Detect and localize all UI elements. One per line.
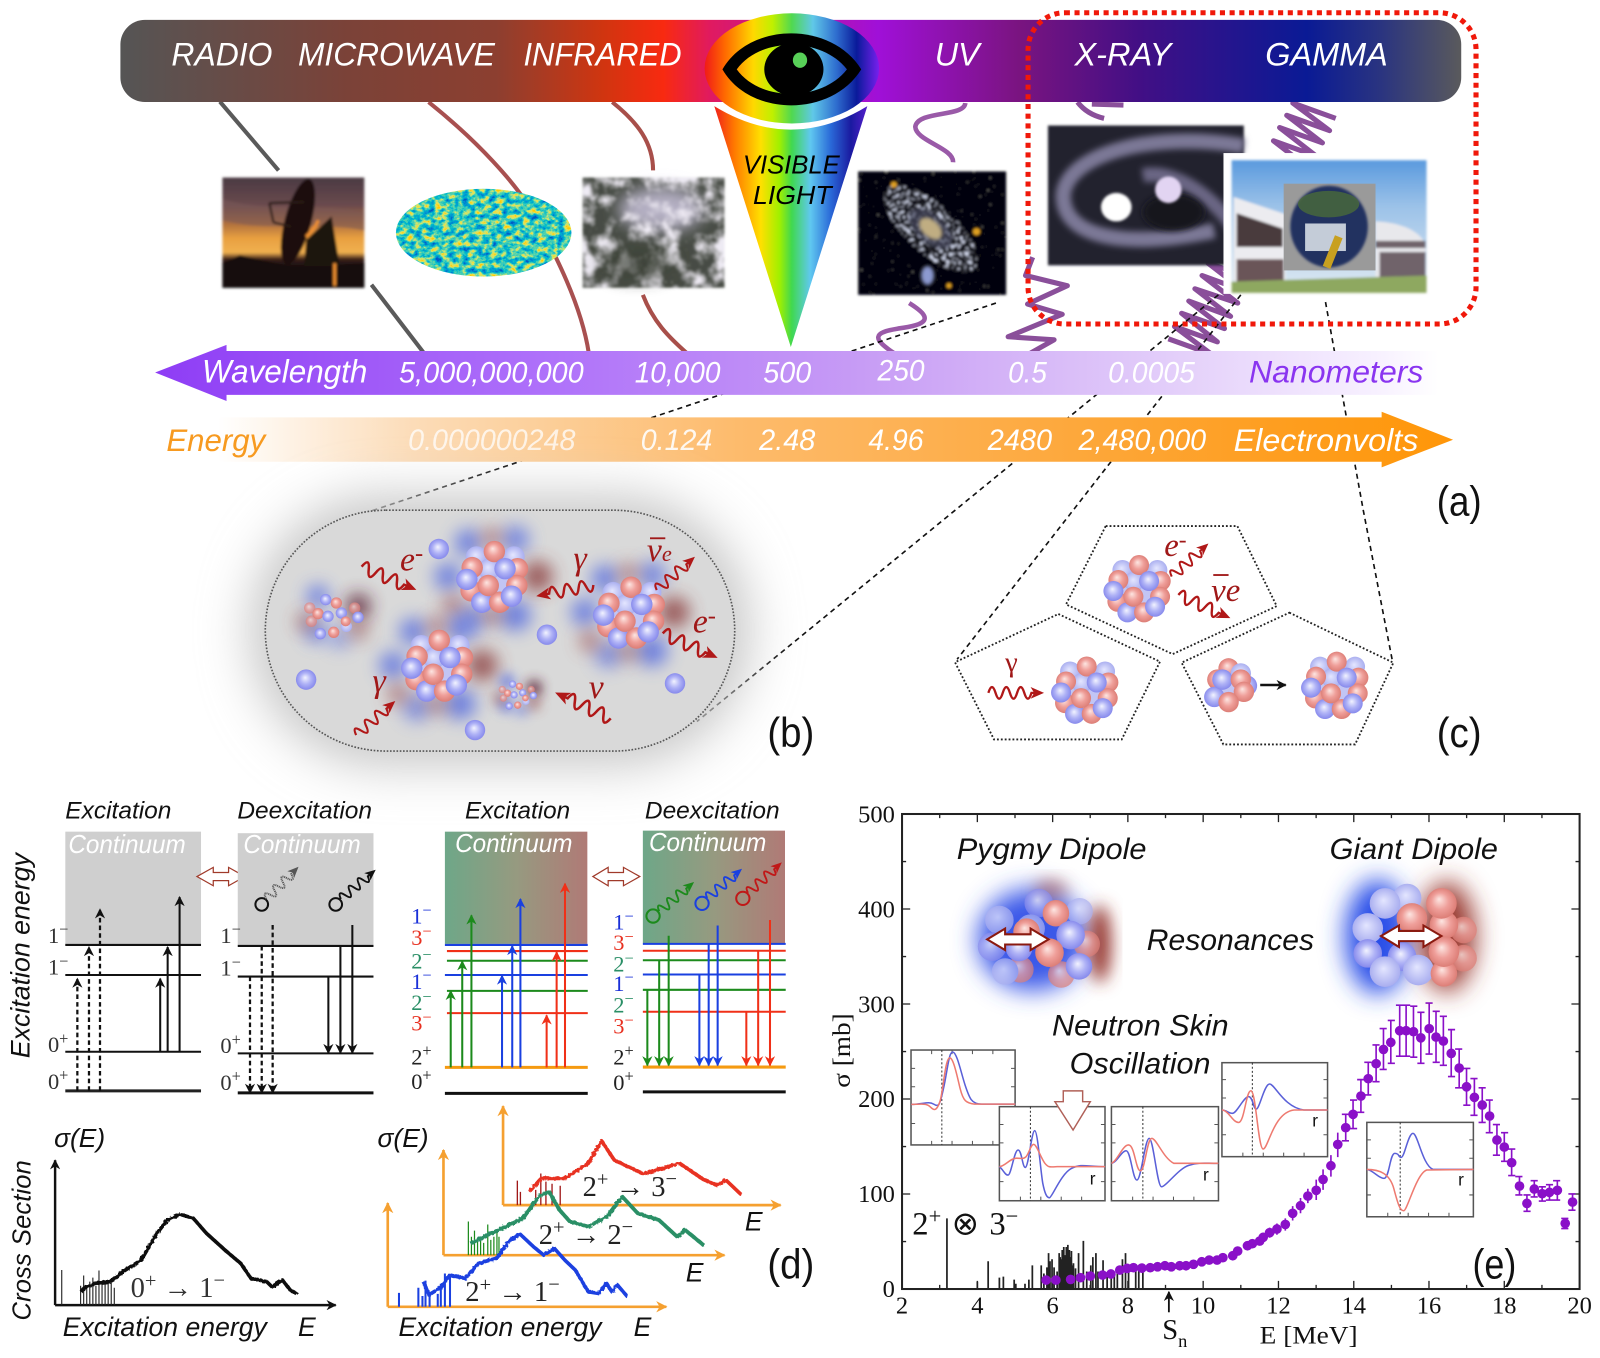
- panel (b): nuclei in stellar plasma capsule: [250, 495, 814, 766]
- wavelength labels: 0.0005: [1108, 357, 1195, 390]
- axis title: excitation energy: Excitation energy: [6, 851, 36, 1058]
- pentagon: beta decay: -: [1179, 527, 1187, 553]
- scheme: deexcitation, grey: [220, 797, 379, 1095]
- red spectrum: −: [666, 1169, 677, 1191]
- photo: radio dish at sunset: [222, 176, 364, 288]
- scheme: deexcitation, grey: −: [232, 920, 241, 939]
- band labels: GAMMA: [1265, 35, 1388, 72]
- particle labels: e: [693, 604, 708, 641]
- wavelength labels: 500: [763, 357, 812, 390]
- energy labels: 2.48: [758, 424, 816, 457]
- blue spectrum: [388, 1203, 666, 1308]
- particle labels: [372, 532, 716, 706]
- x axis labels: 4: [971, 1292, 983, 1319]
- energy labels: 2480: [987, 424, 1053, 457]
- wave: microwave: [429, 102, 589, 353]
- red spectrum: [503, 1106, 781, 1237]
- visible light label: VISIBLE: [743, 151, 841, 179]
- neutron separation marker: [1162, 1292, 1187, 1351]
- scheme: excitation, coloured: 3: [411, 925, 422, 950]
- x axis title: E [MeV]: [1260, 1320, 1358, 1349]
- scheme: deexcitation, grey: 1: [220, 923, 232, 948]
- scheme: deexcitation, coloured: −: [624, 927, 634, 946]
- scheme: deexcitation, grey: +: [232, 1067, 241, 1086]
- scheme: excitation, coloured: Continuum: [455, 830, 572, 858]
- y axis labels: 400: [858, 896, 895, 923]
- wavelength arrow: [155, 345, 1439, 401]
- chart: 2+ to 1-, 2-, 3- strength: E: [634, 1312, 652, 1342]
- scheme: deexcitation, grey: 1: [220, 956, 232, 981]
- chart: 0+ to 1- strength: −: [214, 1270, 225, 1292]
- scheme: deexcitation, coloured: 1: [613, 971, 624, 996]
- wavelength labels: Nanometers: [1249, 354, 1424, 390]
- resonance heading: pygmy: Pygmy Dipole: [957, 833, 1147, 866]
- icon: double arrow: [593, 867, 640, 886]
- inset: transition density 5: [1367, 1122, 1473, 1217]
- axis title: cross section: Cross Section: [9, 1160, 37, 1320]
- scheme: deexcitation, coloured: 2: [613, 1044, 624, 1069]
- wavelength labels: 250: [877, 355, 925, 388]
- blue spectrum: → 1: [491, 1277, 548, 1308]
- green spectrum: −: [622, 1217, 633, 1239]
- scheme: deexcitation, coloured: +: [624, 1067, 634, 1086]
- band labels: MICROWAVE: [298, 35, 496, 72]
- inset: transition density 2: r: [1090, 1169, 1096, 1189]
- chart: 0+ to 1- strength: +: [145, 1270, 156, 1292]
- image: cosmic microwave background map: [396, 189, 571, 277]
- resonance heading: Resonances: [1147, 924, 1314, 957]
- label (e): (e): [1472, 1241, 1516, 1288]
- energy arrow: [153, 412, 1453, 467]
- red spectrum: E: [745, 1207, 763, 1237]
- x axis labels: 14: [1342, 1292, 1366, 1319]
- visible light label: LIGHT: [753, 182, 834, 210]
- scheme: deexcitation, coloured: 3: [613, 930, 624, 955]
- y axis labels: 300: [858, 991, 895, 1018]
- scheme: deexcitation, coloured: −: [624, 989, 634, 1008]
- scheme: deexcitation, coloured: −: [624, 906, 634, 925]
- scheme: excitation, coloured: 2: [411, 990, 422, 1015]
- spectrum sticks: [947, 1218, 1143, 1289]
- energy labels: 0.124: [641, 424, 712, 457]
- photo: nebula: [583, 178, 724, 288]
- blue spectrum: −: [548, 1274, 560, 1296]
- wavelength labels: [202, 353, 1424, 390]
- wave: x-ray: [1008, 102, 1123, 353]
- spectrum bar: [120, 20, 1461, 102]
- arrow: neutron skin pointer: [1055, 1091, 1090, 1130]
- band labels: RADIO: [171, 35, 272, 72]
- scheme: deexcitation, grey: 0: [220, 1033, 232, 1058]
- y axis labels: 100: [858, 1181, 895, 1208]
- scheme: excitation, coloured: [411, 797, 588, 1094]
- scheme: excitation, coloured: −: [422, 1007, 432, 1026]
- scheme: excitation, coloured: 2: [411, 948, 422, 973]
- pentagon: beta decay: e: [1164, 528, 1179, 564]
- particle labels: e: [400, 541, 415, 578]
- scheme: excitation, coloured: 1: [411, 903, 422, 928]
- wave: ultraviolet: [878, 103, 965, 353]
- inset: transition density 3: r: [1203, 1165, 1209, 1185]
- pentagon: beta decay: νe: [1211, 573, 1240, 609]
- red dotted highlight box: [1028, 13, 1476, 324]
- neutron separation marker: n: [1178, 1331, 1187, 1351]
- scheme: excitation, grey: 0: [48, 1032, 59, 1057]
- y axis labels: 200: [858, 1086, 895, 1113]
- photo: spiral galaxy: [858, 171, 1006, 295]
- scheme: deexcitation, coloured: 0: [613, 1070, 624, 1095]
- scheme: deexcitation, grey: 0: [220, 1070, 232, 1095]
- neutron separation marker: S: [1162, 1315, 1178, 1346]
- dotted capsule: [265, 510, 735, 751]
- scheme: deexcitation, coloured: +: [624, 1041, 634, 1060]
- scheme: deexcitation, coloured: −: [624, 1011, 634, 1030]
- chart: 0+ to 1- strength: [54, 1125, 336, 1342]
- anti-neutrino bar: [650, 537, 665, 539]
- particle labels: -: [708, 602, 716, 629]
- visible light cone: [714, 106, 867, 347]
- data points: [1046, 1029, 1573, 1280]
- chart: 2+ to 1-, 2-, 3- strength: Excitation energy: [398, 1312, 603, 1342]
- axis title: sigma: σ [mb]: [827, 1013, 856, 1088]
- inset: transition density 4: [1222, 1063, 1328, 1157]
- red spectrum: +: [597, 1169, 608, 1191]
- icon: double arrow: [197, 867, 245, 886]
- chart: 0+ to 1- strength: E: [298, 1312, 316, 1342]
- scheme: deexcitation, grey: −: [232, 952, 241, 971]
- scheme: excitation, grey: 0: [48, 1069, 59, 1094]
- inset: transition density 2: [999, 1107, 1105, 1201]
- particle labels: -: [415, 540, 423, 567]
- particle labels: γ: [372, 663, 386, 700]
- scheme: excitation, grey: +: [59, 1029, 68, 1048]
- resonance heading: giant: Giant Dipole: [1330, 833, 1498, 866]
- scheme: excitation, coloured: 0: [411, 1069, 422, 1094]
- chart: 0+ to 1- strength: 0: [131, 1273, 145, 1304]
- red spectrum: → 3: [608, 1172, 666, 1203]
- pentagon: neutron capture: [1182, 613, 1393, 744]
- free neutrons: [296, 539, 685, 740]
- scheme: excitation, grey: 1: [48, 955, 59, 980]
- phonon coupling label: +: [929, 1204, 941, 1229]
- phonon coupling label: 2: [912, 1207, 929, 1243]
- green spectrum: E: [686, 1258, 704, 1288]
- panel (d): level schemes and cross sections: [6, 797, 814, 1342]
- particle labels: νe: [647, 532, 672, 569]
- heading: neutron skin oscillation: Oscillation: [1070, 1048, 1211, 1081]
- chart: 0+ to 1- strength: Excitation energy: [63, 1312, 269, 1342]
- green spectrum: 2: [539, 1220, 553, 1251]
- plot frame: [902, 814, 1580, 1289]
- scheme: excitation, coloured: +: [422, 1041, 432, 1060]
- band labels: UV: [935, 35, 983, 72]
- wavy arrows: [353, 553, 720, 739]
- scheme: excitation, grey: −: [59, 920, 68, 939]
- scheme: excitation, coloured: 3: [411, 1011, 422, 1036]
- scheme: deexcitation, grey: +: [232, 1030, 241, 1049]
- y axis labels: [858, 801, 895, 1303]
- scheme: excitation, coloured: −: [422, 945, 432, 964]
- scheme: excitation, grey: Continuum: [68, 831, 186, 859]
- scheme: deexcitation, grey: Deexcitation: [237, 797, 372, 824]
- capsule glow: [250, 495, 750, 766]
- energy labels: Energy: [166, 422, 267, 458]
- nucleus: giant dipole: [1345, 880, 1477, 994]
- band labels: INFRARED: [523, 35, 682, 72]
- scheme: excitation, coloured: −: [422, 922, 432, 941]
- scheme: excitation, coloured: 2: [411, 1044, 422, 1069]
- particle labels: γ: [573, 540, 587, 577]
- photo: binary neutron star merger: [1048, 126, 1244, 265]
- icon: eye: [705, 13, 879, 123]
- phonon coupling label: −: [1006, 1204, 1018, 1229]
- scheme: deexcitation, coloured: −: [624, 948, 634, 967]
- scheme: excitation, grey: 1: [48, 923, 59, 948]
- scheme: deexcitation, coloured: 1: [613, 910, 624, 935]
- photo: ALICE / laboratory building: [1223, 153, 1428, 294]
- energy labels: 2,480,000: [1078, 424, 1207, 457]
- inset: transition density 3: [1111, 1107, 1218, 1201]
- scheme: excitation, coloured: −: [422, 900, 432, 919]
- chart: 0+ to 1- strength: → 1: [156, 1273, 214, 1304]
- scheme: excitation, coloured: −: [422, 966, 432, 985]
- band labels: [171, 35, 1388, 72]
- x axis labels: 18: [1492, 1292, 1517, 1319]
- panel (e): photoabsorption cross section: [827, 801, 1592, 1351]
- x axis labels: 6: [1047, 1292, 1059, 1319]
- scheme: excitation, grey: +: [59, 1066, 68, 1085]
- chart: 2+ to 1-, 2-, 3- strength: [378, 1106, 781, 1342]
- wave: gamma: [1168, 103, 1336, 354]
- green spectrum: +: [553, 1217, 565, 1239]
- scheme: excitation, grey: Excitation: [65, 797, 171, 824]
- scheme: excitation, coloured: +: [422, 1066, 432, 1085]
- inset: transition density 1: [911, 1050, 1015, 1145]
- scheme: deexcitation, coloured: −: [624, 968, 634, 987]
- band labels: X-RAY: [1073, 35, 1174, 72]
- label (b): (b): [767, 709, 814, 756]
- wave: radio: [220, 102, 424, 353]
- energy labels: [166, 422, 1419, 458]
- blue spectrum: +: [480, 1274, 491, 1296]
- label (a): (a): [1437, 477, 1482, 524]
- x axis labels: 16: [1417, 1292, 1441, 1319]
- wavelength labels: 0.5: [1008, 357, 1047, 390]
- x axis labels: 8: [1122, 1292, 1134, 1319]
- y axis labels: 500: [858, 801, 895, 828]
- green spectrum: → 2: [565, 1220, 622, 1251]
- inset: transition density 4: r: [1312, 1111, 1318, 1131]
- scheme: deexcitation, coloured: Continuum: [649, 829, 766, 857]
- panel (c): reaction pentagons: [955, 526, 1482, 756]
- x axis labels: 12: [1266, 1292, 1291, 1319]
- chart: 0+ to 1- strength: σ(E): [54, 1125, 105, 1153]
- label (d): (d): [767, 1241, 814, 1288]
- scheme: excitation, grey: −: [59, 951, 68, 970]
- x axis labels: [896, 1292, 1592, 1319]
- heading: neutron skin oscillation: Neutron Skin: [1052, 1010, 1229, 1043]
- chart: 2+ to 1-, 2-, 3- strength: σ(E): [378, 1125, 429, 1153]
- wave: infrared: [612, 102, 687, 353]
- pentagon: beta decay: [1066, 526, 1277, 654]
- scheme: deexcitation, coloured: 2: [613, 951, 624, 976]
- scheme: excitation, coloured: −: [422, 987, 432, 1006]
- wavelength labels: 10,000: [635, 357, 721, 390]
- nucleus group: [297, 526, 690, 721]
- scheme: excitation, grey: [48, 797, 201, 1094]
- energy labels: Electronvolts: [1234, 422, 1419, 458]
- green spectrum: [443, 1150, 724, 1288]
- phonon coupling label: ⊗: [941, 1205, 989, 1243]
- scheme: excitation, coloured: Excitation: [465, 797, 570, 824]
- pentagon: gamma capture: [955, 614, 1160, 739]
- blue spectrum: 2: [465, 1277, 480, 1308]
- scheme: deexcitation, coloured: Deexcitation: [645, 797, 780, 824]
- heading: neutron skin oscillation: [1052, 1010, 1229, 1081]
- wavelength labels: 5,000,000,000: [399, 357, 584, 390]
- x axis labels: 2: [896, 1292, 908, 1319]
- panel (a): electromagnetic spectrum: [120, 13, 1482, 721]
- inset: transition density 5: r: [1458, 1170, 1464, 1190]
- particle labels: ν: [589, 669, 604, 706]
- red spectrum: 2: [583, 1172, 597, 1203]
- scheme: deexcitation, coloured: 3: [613, 1014, 624, 1039]
- scheme: excitation, coloured: 1: [411, 969, 422, 994]
- energy labels: 0.000000248: [408, 424, 576, 457]
- nucleus: pygmy dipole: [978, 880, 1111, 991]
- energy labels: 4.96: [868, 424, 924, 457]
- wavelength labels: Wavelength: [202, 353, 367, 390]
- x axis labels: 20: [1567, 1292, 1592, 1319]
- scheme: deexcitation, coloured: [613, 797, 786, 1095]
- y axis labels: 0: [883, 1276, 895, 1303]
- scheme: deexcitation, grey: Continuum: [243, 831, 361, 859]
- phonon coupling label: 3: [989, 1207, 1006, 1243]
- error bars: [1247, 1003, 1576, 1249]
- pentagon: gamma capture: γ: [1004, 647, 1018, 678]
- scheme: deexcitation, coloured: 2: [613, 992, 624, 1017]
- x axis labels: 10: [1191, 1292, 1215, 1319]
- label (c): (c): [1437, 709, 1482, 756]
- visible light label: [743, 151, 841, 210]
- dashed zoom lines: [367, 295, 1393, 721]
